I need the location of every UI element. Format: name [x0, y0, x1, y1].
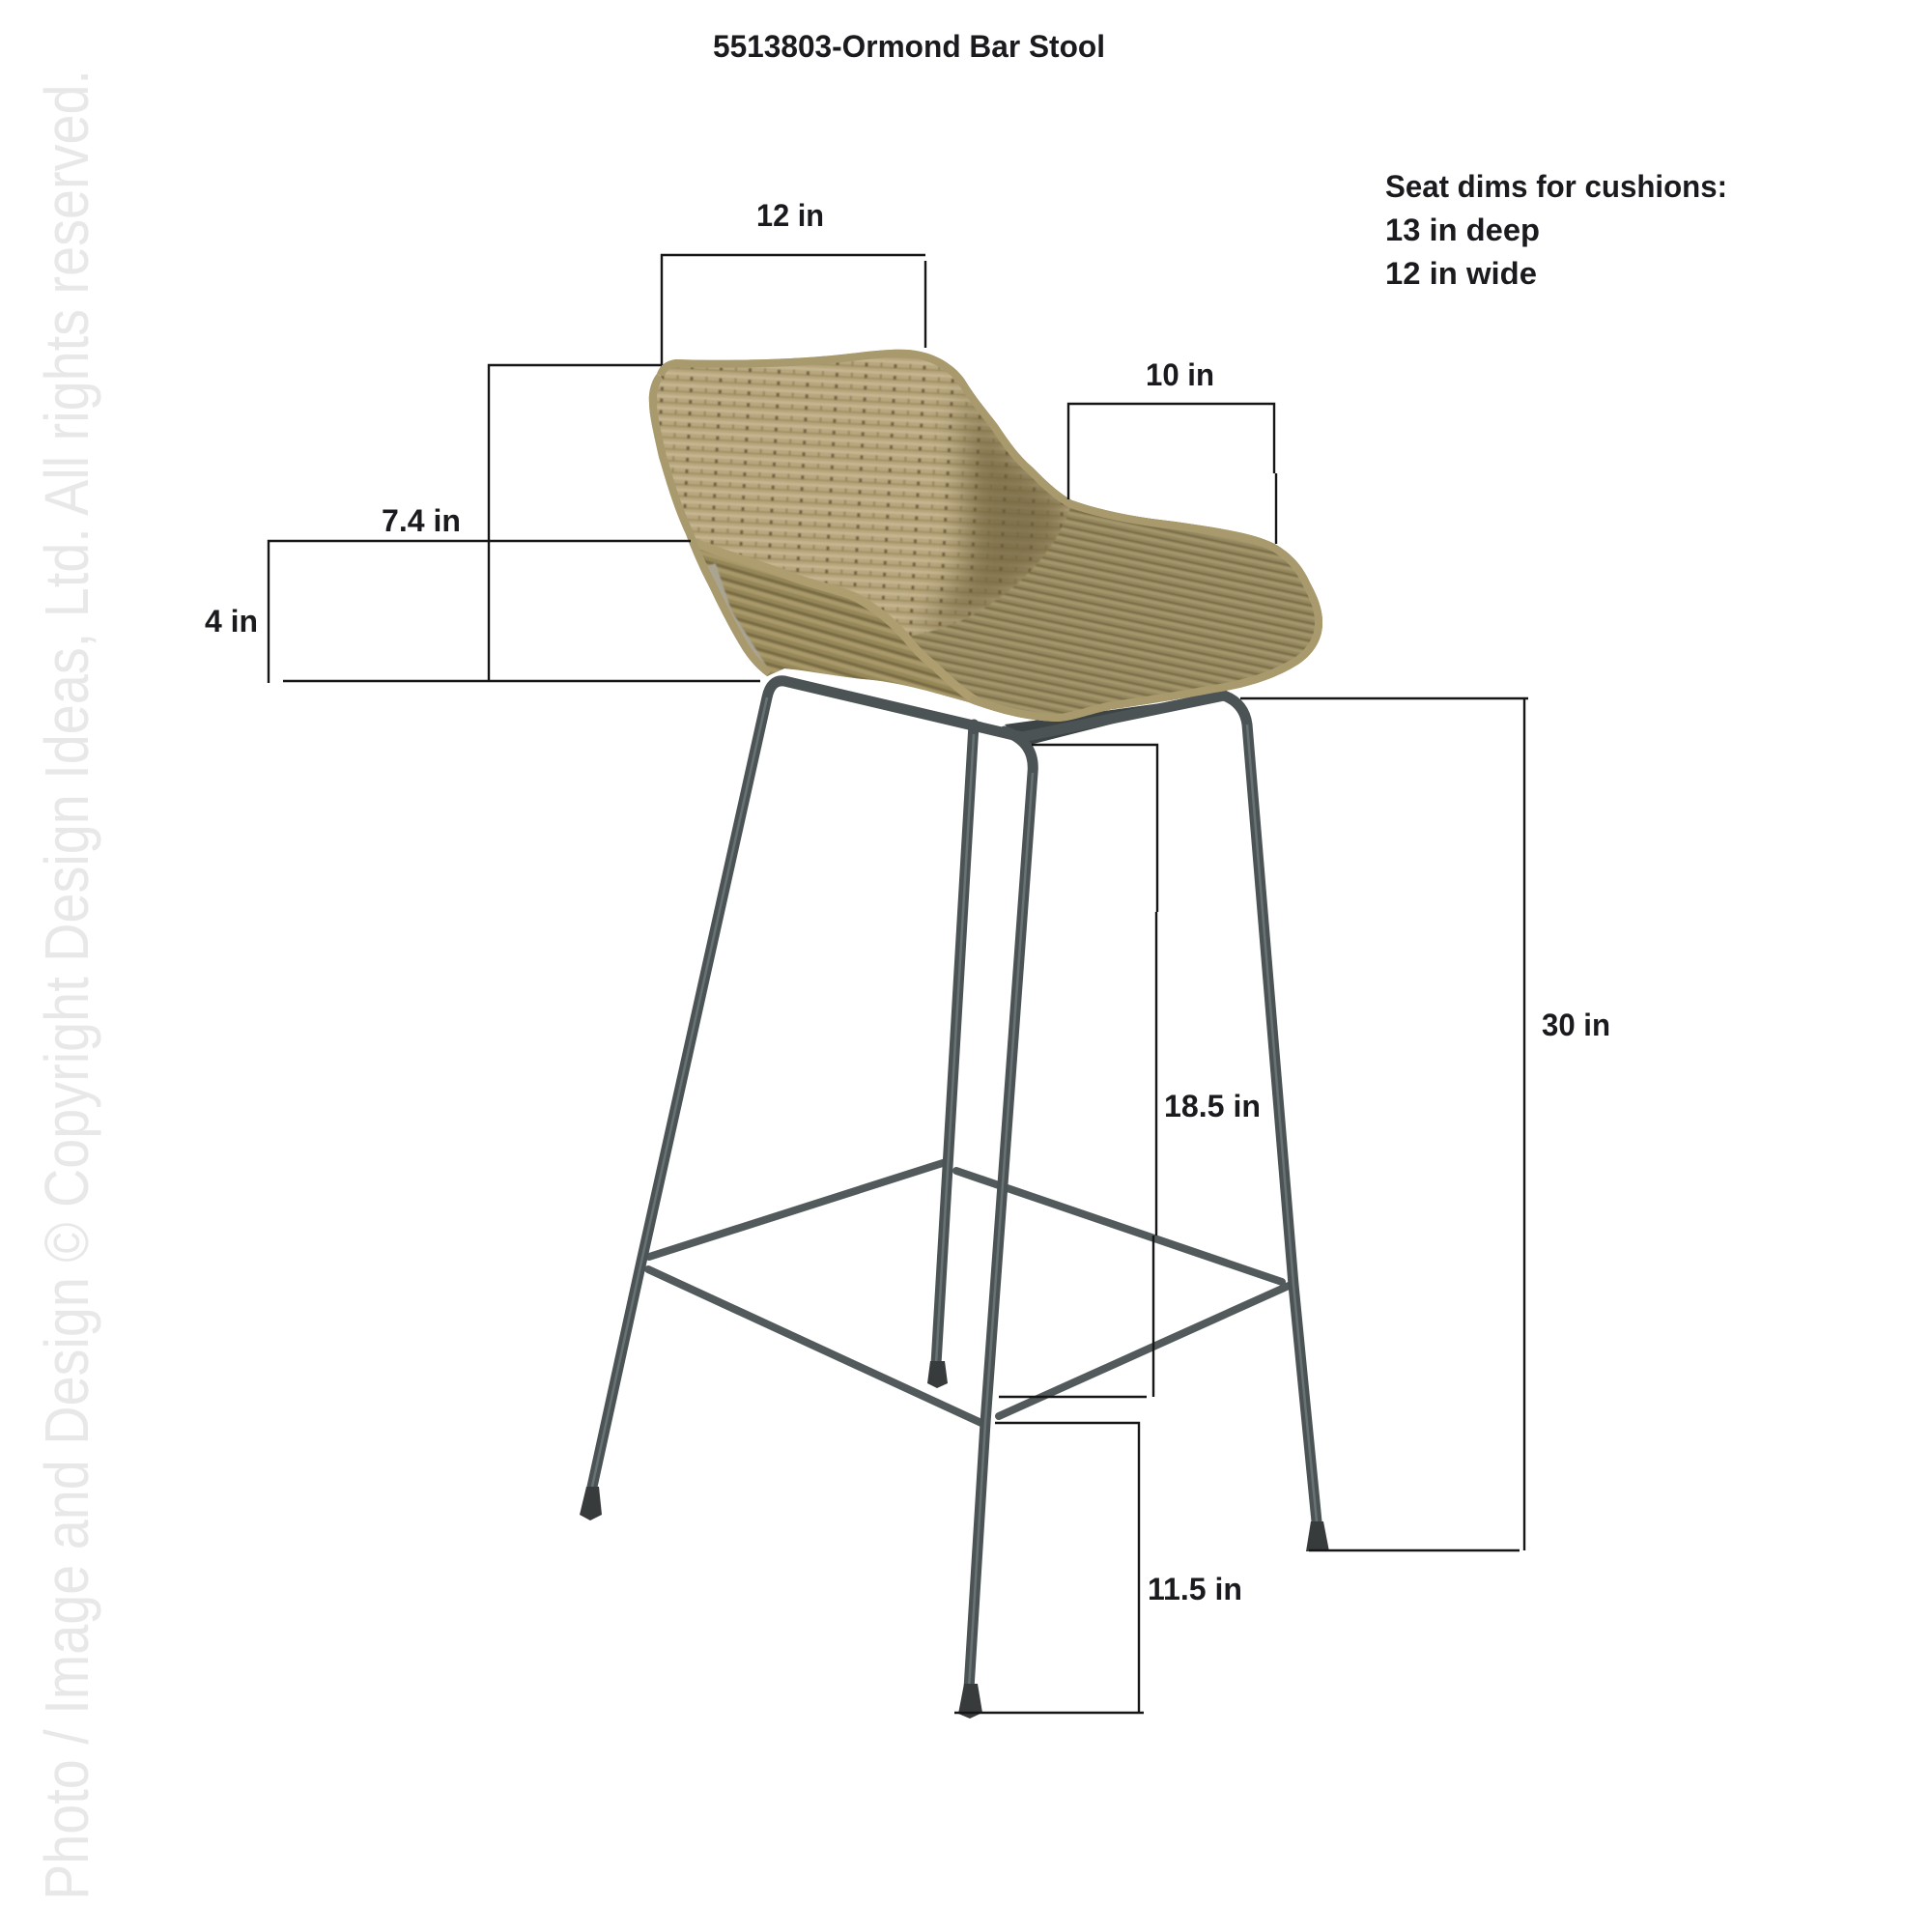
dimension: 4 in: [205, 541, 691, 683]
dimension: 12 in width: [662, 198, 925, 365]
dimension: 4 in: 4 in: [205, 604, 258, 639]
dimension: 10 in: 10 in: [1146, 357, 1214, 392]
dimension: 18.5 in: 18.5 in: [1164, 1089, 1261, 1123]
wicker seat shell: [649, 350, 1322, 722]
dimension: 30 in: 30 in: [1542, 1008, 1610, 1042]
dimension: 11.5 in: [954, 1423, 1242, 1713]
seat dimensions note: 13 in deep: [1385, 213, 1540, 247]
dimension: 7.4 in: 7.4 in: [382, 503, 461, 538]
seat dimensions note: 12 in wide: [1385, 256, 1537, 291]
bar stool illustration: [580, 338, 1352, 1719]
seat dimensions note: [1385, 169, 1727, 291]
rim of shell: [691, 541, 998, 712]
rubber feet: [580, 1361, 1329, 1719]
dimension: 18.5 in: [999, 745, 1261, 1397]
seat back: [638, 338, 1333, 734]
dimension: 7.4 in: [283, 365, 760, 681]
dimension: 11.5 in: 11.5 in: [1148, 1572, 1242, 1606]
title: 5513803-Ormond Bar Stool: [713, 29, 1105, 64]
seat pan: [911, 500, 1322, 722]
dimension: 10 in: [1068, 357, 1276, 544]
metal legs and footrest frame: [592, 681, 1317, 1689]
outer side of shell: [689, 543, 993, 711]
dimension: 12 in width: 12 in: [756, 198, 824, 233]
curved crease shading: [918, 386, 1072, 638]
seat dimensions note: Seat dims for cushions:: [1385, 169, 1727, 204]
dimension: 30 in: [1240, 698, 1610, 1550]
grey weave edge: [710, 565, 763, 671]
